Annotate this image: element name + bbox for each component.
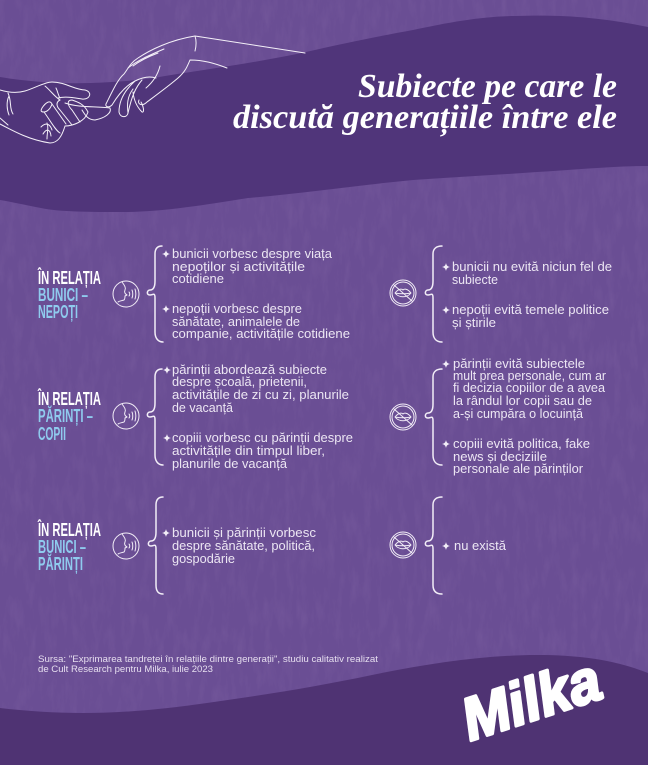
row 3: label: PĂRINȚI: [38, 553, 83, 574]
brace row 2 right: [425, 369, 442, 465]
icon: speaking head row 3: [113, 533, 139, 559]
list row 2 left: copiii vorbesc cu părinții despre: [172, 430, 353, 445]
list row 1 right: nepoții evită temele politice: [452, 302, 609, 317]
icon: speaking head row 1: [113, 281, 139, 307]
list row 2 left: de vacanță: [172, 400, 234, 415]
logo: Milka: Milka: [453, 646, 609, 753]
top band: [0, 16, 648, 212]
row 2: label: COPII: [38, 424, 66, 444]
list row 2 right: mult prea personale, cum ar: [453, 368, 607, 383]
brace row 3 right: [425, 497, 442, 594]
list row 2 right: [442, 356, 607, 476]
list row 3 left: bunicii și părinții vorbesc: [172, 525, 316, 540]
brace row 3 left: [148, 497, 163, 594]
brace row 1 right: [425, 246, 442, 342]
list row 2 right: fi decizia copiilor de a avea: [453, 380, 606, 395]
list row 1 left: sănătate, animalele de: [172, 314, 300, 329]
list row 2 left: [163, 362, 353, 471]
title: discută generațiile între ele: [233, 99, 617, 137]
list row 1 left: nepoții vorbesc despre: [172, 301, 302, 316]
list row 2 right: a-și cumpăra o locuință: [453, 406, 584, 421]
icon: crossed lips row 3: [390, 532, 416, 558]
brace row 1 left: [147, 246, 163, 342]
list row 3 left: despre sănătate, politică,: [172, 538, 315, 553]
list row 3 right: nu există: [454, 538, 507, 553]
icon: crossed lips row 2: [390, 404, 416, 430]
row 3: label: BUNICI –: [38, 537, 86, 557]
list row 3 left: [162, 525, 316, 566]
title: Subiecte pe care le: [358, 68, 617, 105]
list row 1 left: companie, activitățile cotidiene: [172, 326, 350, 341]
row 3: label: [37, 519, 101, 574]
list row 1 left: cotidiene: [172, 271, 224, 286]
row 2: label: ÎN RELAȚIA: [37, 388, 101, 409]
list row 2 right: la rândul lor copii sau de: [453, 393, 592, 408]
row 2: label: [37, 388, 101, 444]
row 3: label: ÎN RELAȚIA: [37, 519, 101, 540]
source note: [38, 654, 378, 675]
list row 2 left: activitățile din timpul liber,: [172, 443, 325, 458]
list row 1 right: bunicii nu evită niciun fel de: [452, 259, 612, 274]
row 2: label: PĂRINȚI –: [38, 405, 93, 426]
icon: speaking head row 2: [113, 403, 139, 429]
brace row 2 left: [147, 369, 163, 465]
list row 1 right: și știrile: [452, 315, 496, 330]
source note: Sursa: "Exprimarea tandreței în relațiile dintre generații", studiu calitativ realizat: [38, 654, 378, 665]
list row 2 right: news și deciziile: [453, 449, 547, 464]
row 1: label: [37, 267, 101, 322]
illustration: two hands touching: [0, 36, 305, 143]
list row 3 left: gospodărie: [172, 551, 235, 566]
row 1: label: BUNICI –: [38, 285, 88, 305]
list row 1 left: [162, 246, 350, 341]
list row 2 left: părinții abordează subiecte: [172, 362, 327, 377]
list row 1 left: bunicii vorbesc despre viața: [172, 246, 333, 261]
icon: crossed lips row 1: [390, 280, 416, 306]
source note: de Cult Research pentru Milka, iulie 2023: [38, 664, 213, 675]
row 1: label: ÎN RELAȚIA: [37, 267, 101, 288]
list row 1 right: [442, 259, 612, 330]
bottom band: [0, 655, 648, 765]
list row 2 right: părinții evită subiectele: [453, 356, 585, 371]
list row 2 right: personale ale părinților: [453, 461, 584, 476]
list row 2 right: copiii evită politica, fake: [453, 436, 590, 451]
title: [233, 68, 617, 137]
list row 1 left: nepoților și activitățile: [172, 259, 305, 274]
list row 2 left: planurile de vacanță: [172, 456, 288, 471]
list row 2 left: despre școală, prietenii,: [172, 374, 307, 389]
list row 2 left: activitățile de zi cu zi, planurile: [172, 387, 349, 402]
list row 1 right: subiecte: [452, 272, 498, 287]
row 1: label: NEPOȚI: [38, 302, 78, 322]
